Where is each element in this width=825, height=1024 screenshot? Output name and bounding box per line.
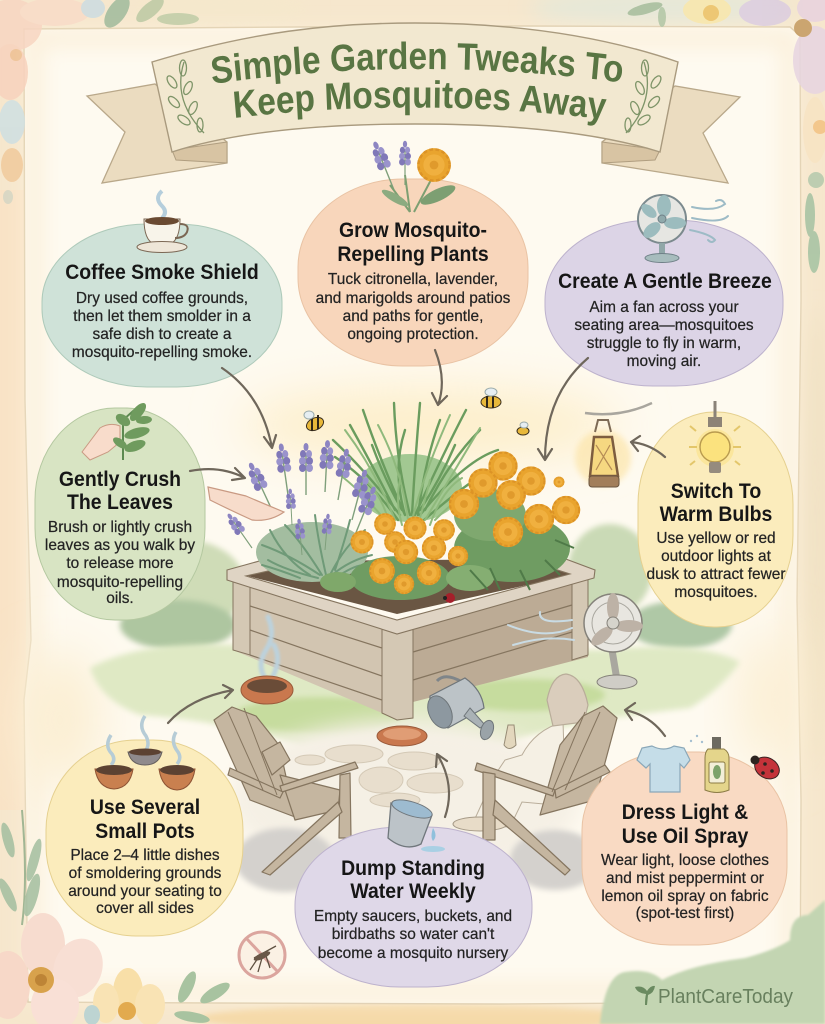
body text xyxy=(68,847,222,917)
body text: outdoor lights at xyxy=(661,548,772,565)
arrow: coffee to plants xyxy=(222,368,276,448)
marigold foliage xyxy=(320,489,574,600)
icon: desk fan xyxy=(638,195,686,262)
body text: oils. xyxy=(106,590,134,607)
sprig: left xyxy=(165,60,204,133)
bubble xyxy=(295,827,532,987)
title text: Keep Mosquitoes Away xyxy=(234,80,606,126)
bubble xyxy=(42,224,282,387)
banner folds xyxy=(172,142,660,163)
body text: safe dish to create a xyxy=(92,326,232,343)
bed right face xyxy=(413,577,588,702)
marigolds: right group xyxy=(449,451,580,547)
heading: Water Weekly xyxy=(350,879,476,903)
heading xyxy=(59,467,181,514)
arrow: breeze to bed xyxy=(538,358,588,460)
chair shadow: right xyxy=(510,830,600,890)
title text: Simple Garden Tweaks To xyxy=(212,42,622,84)
heading: Small Pots xyxy=(95,819,195,843)
leaves: bottom-left xyxy=(0,810,45,925)
body text: Wear light, loose clothes xyxy=(601,852,769,869)
leaves: bottom stem xyxy=(173,969,233,1024)
body text xyxy=(45,519,195,607)
lawn bright patch xyxy=(235,697,405,733)
body text: and marigolds around patios xyxy=(316,290,511,307)
body text: Empty saucers, buckets, and xyxy=(314,908,512,925)
body text: Tuck citronella, lavender, xyxy=(328,271,498,288)
panel: switch to warm bulbs xyxy=(575,401,793,627)
icon: t-shirt xyxy=(637,746,690,792)
icon: hand and leaf xyxy=(82,400,152,460)
body text: (spot-test first) xyxy=(636,905,734,922)
citronella grass xyxy=(333,403,498,525)
heading: Warm Bulbs xyxy=(660,502,772,526)
icon: wind lines xyxy=(690,200,728,242)
background bush: left xyxy=(120,540,245,650)
panel: grow mosquito-repelling plants xyxy=(298,139,528,366)
marigolds: front group xyxy=(351,513,468,594)
heading xyxy=(622,800,749,848)
panel: gently crush the leaves xyxy=(35,400,205,620)
garden scene xyxy=(90,388,740,892)
body text: Use yellow or red xyxy=(656,530,776,547)
body text: Dry used coffee grounds, xyxy=(76,290,248,307)
body text xyxy=(601,852,769,922)
heading: Repelling Plants xyxy=(337,242,489,266)
body text xyxy=(574,299,754,370)
bed left face xyxy=(233,580,382,713)
title text xyxy=(212,42,622,126)
bee: small right xyxy=(517,422,529,435)
chair shadow: left xyxy=(235,828,335,892)
banner right tail xyxy=(602,86,740,183)
banner face xyxy=(152,23,678,152)
watering can xyxy=(423,677,496,741)
body text: mosquito-repelling smoke. xyxy=(72,344,252,361)
heading: Dress Light & xyxy=(622,800,748,824)
body text: lemon oil spray on fabric xyxy=(601,888,769,905)
body text: struggle to fly in warm, xyxy=(587,335,741,352)
person in chair xyxy=(453,674,588,831)
heading xyxy=(660,479,772,526)
bubble xyxy=(46,740,243,936)
fan by the bed xyxy=(584,593,643,689)
bubble xyxy=(582,752,787,945)
body text: mosquito-repelling xyxy=(57,574,183,591)
bed rim xyxy=(227,558,595,634)
body text: Place 2–4 little dishes xyxy=(70,847,220,864)
flower: top-left pink xyxy=(0,0,90,100)
string line xyxy=(585,403,652,414)
icon: lantern xyxy=(575,420,631,487)
flower: top-right purple xyxy=(739,0,825,94)
arrow: plants bubble to bed xyxy=(432,350,447,405)
leaves and flower: top-right xyxy=(626,0,731,27)
body text: become a mosquito nursery xyxy=(318,945,508,962)
body text: seating area—mosquitoes xyxy=(574,317,754,334)
heading: Create A Gentle Breeze xyxy=(558,269,772,293)
arrow: dump water to saucer xyxy=(436,754,449,817)
patio xyxy=(230,720,580,880)
icon: oil spray bottle xyxy=(690,735,729,792)
lawn xyxy=(90,644,740,745)
body text xyxy=(72,290,252,361)
leaves: top-left xyxy=(81,0,199,32)
flower: bottom-left pink xyxy=(0,913,111,1024)
watercolor foliage bottom-right xyxy=(600,900,825,1024)
body text: to release more xyxy=(66,555,174,572)
body text: moving air. xyxy=(627,353,701,370)
saucer xyxy=(377,726,427,746)
smoke pot with steam xyxy=(241,617,293,704)
background bush: right xyxy=(568,524,732,649)
heading: Use Several xyxy=(90,795,200,819)
heading xyxy=(341,856,485,903)
arrow: bulb to lantern xyxy=(631,436,665,457)
icon: ladybug xyxy=(750,753,783,783)
raised bed xyxy=(227,558,595,720)
icon: coffee cup xyxy=(137,191,188,252)
icon: lavender and marigold xyxy=(368,139,458,212)
soil xyxy=(232,559,590,614)
heading: Dump Standing xyxy=(341,856,485,880)
body text: then let them smolder in a xyxy=(73,308,251,325)
arrow: crush to lavender xyxy=(190,468,245,480)
bubble xyxy=(298,179,528,366)
icon: no mosquito sign xyxy=(239,932,285,978)
arrow: small pots to pot xyxy=(168,685,233,723)
breeze lines xyxy=(508,612,574,645)
body text: Aim a fan across your xyxy=(589,299,739,316)
patio stones xyxy=(295,745,463,807)
panel: dress light and use oil spray xyxy=(582,735,787,945)
body text xyxy=(647,530,785,601)
bubble xyxy=(638,412,793,627)
adirondack chair: left xyxy=(214,707,358,875)
body text: birdbaths so water can't xyxy=(332,926,495,943)
body text: of smoldering grounds xyxy=(69,865,222,882)
hand crushing lavender xyxy=(208,487,284,520)
sprig: right xyxy=(625,60,663,133)
bubble xyxy=(35,408,205,620)
lawn right patch xyxy=(445,679,605,711)
body text: Brush or lightly crush xyxy=(48,519,192,536)
flower: bottom yellow xyxy=(84,968,165,1024)
heading: Switch To xyxy=(671,479,761,503)
body text: dusk to attract fewer xyxy=(647,566,785,583)
arrow: dress to person xyxy=(625,703,665,736)
arrows xyxy=(168,350,665,817)
adirondack chair: right xyxy=(475,706,617,875)
body text: and paths for gentle, xyxy=(343,308,483,325)
panel: create a gentle breeze xyxy=(545,195,783,386)
body text: ongoing protection. xyxy=(347,326,479,343)
lavender plant xyxy=(224,440,381,582)
heading: Grow Mosquito- xyxy=(339,218,487,242)
icon: light bulb xyxy=(689,401,741,473)
bee: center xyxy=(481,388,501,408)
bee: upper left xyxy=(304,411,326,433)
heading xyxy=(337,218,489,266)
body text: mosquitoes. xyxy=(674,584,758,601)
heading: Gently Crush xyxy=(59,467,181,491)
heading: The Leaves xyxy=(67,490,173,514)
body text: cover all sides xyxy=(96,900,194,917)
plank lines xyxy=(250,605,572,700)
ladybug on rim xyxy=(443,593,455,603)
heading xyxy=(90,795,200,843)
corner posts xyxy=(233,577,588,720)
body text xyxy=(316,271,511,343)
blue and orange blossom: left edge xyxy=(0,100,25,204)
panel: use several small pots xyxy=(46,716,243,936)
body text xyxy=(314,908,512,962)
panel: dump standing water weekly xyxy=(295,796,532,987)
heading: Coffee Smoke Shield xyxy=(65,260,259,284)
body text: leaves as you walk by xyxy=(45,537,195,554)
icon: three smoking dishes xyxy=(95,716,195,790)
title banner xyxy=(86,22,742,184)
heading: Use Oil Spray xyxy=(622,824,749,848)
flower and leaves: right edge xyxy=(803,97,825,273)
logo: PlantCareToday: PlantCareToday xyxy=(658,986,793,1008)
icon: tipped bucket xyxy=(388,796,445,852)
bubble xyxy=(545,220,783,386)
body text: and mist peppermint or xyxy=(606,870,764,887)
banner left tail xyxy=(87,84,227,183)
body text: around your seating to xyxy=(68,883,222,900)
panel: coffee smoke shield xyxy=(42,191,282,387)
